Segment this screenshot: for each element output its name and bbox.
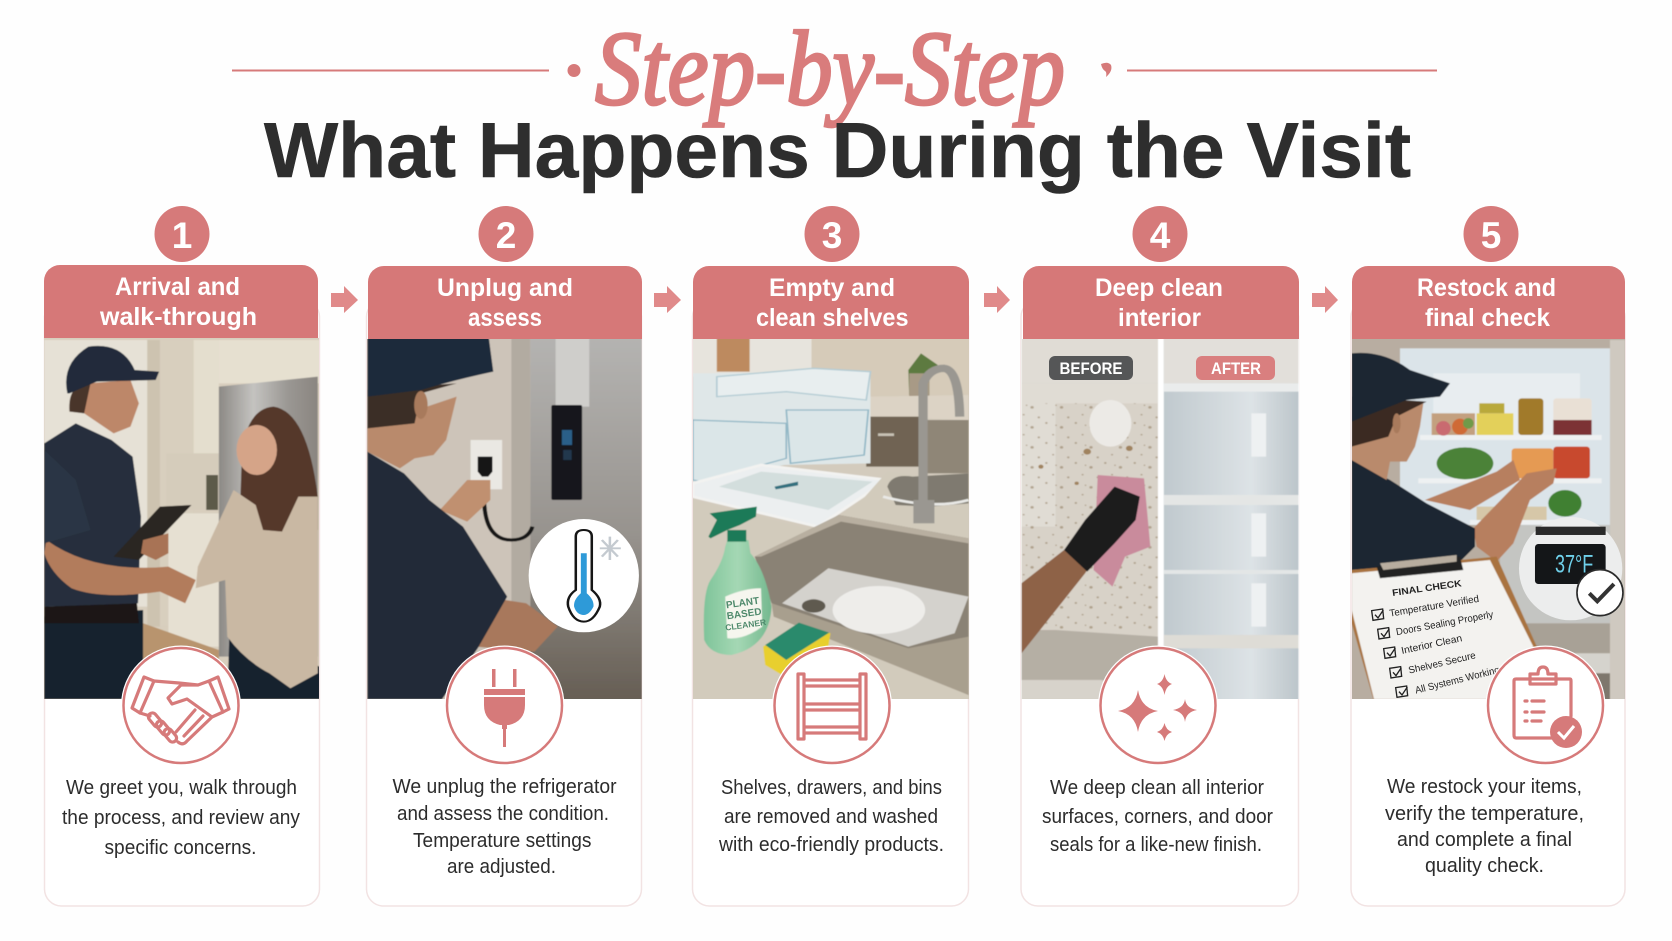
header: unplug: assess — [468, 304, 542, 332]
panel: step 5 — [1350, 206, 1627, 906]
icon: clipboard with check — [1486, 646, 1606, 766]
icon: sparkles — [1098, 646, 1218, 766]
card body — [44, 300, 320, 906]
arrow 1 — [331, 286, 358, 313]
number badge 2 — [478, 206, 534, 262]
number badge 5: 5 — [1481, 215, 1501, 256]
header: empty shelves: Empty and — [769, 274, 895, 302]
clipboard checklist text: FINAL CHECK — [1392, 578, 1463, 598]
script heading: Step-by-Step — [595, 10, 1065, 127]
number badge 2: 2 — [496, 215, 516, 256]
panel: step 1 — [42, 206, 320, 906]
description text: are adjusted. — [447, 856, 556, 878]
header: deep clean — [1023, 266, 1299, 339]
thermostat display badge — [1519, 517, 1623, 620]
description text: with eco-friendly products. — [718, 834, 944, 856]
header: empty shelves: clean shelves — [756, 304, 908, 332]
card body — [1021, 300, 1298, 906]
header: unplug — [368, 266, 642, 339]
arrow 4 — [1312, 286, 1338, 313]
description text: and assess the condition. — [397, 803, 609, 825]
header: restock: Restock and — [1417, 274, 1556, 302]
before label — [1049, 356, 1133, 380]
number badge 3: 3 — [822, 215, 842, 256]
after label: AFTER — [1211, 359, 1261, 378]
number badge 3 — [804, 206, 860, 262]
icon: plug — [444, 646, 564, 766]
photo: technician greets customer — [42, 333, 320, 700]
photo: before and after interior — [1020, 333, 1302, 700]
description text: Temperature settings — [413, 830, 592, 852]
description text — [1042, 777, 1273, 856]
description text: seals for a like-new finish. — [1050, 834, 1262, 856]
header: unplug: Unplug and — [437, 274, 573, 302]
header: deep clean: interior — [1118, 304, 1201, 332]
clipboard checklist text: Shelves Secure — [1408, 650, 1477, 677]
photo: washing shelves in sink — [689, 333, 971, 700]
title block — [232, 10, 1437, 194]
thermostat display badge: 37°F — [1555, 551, 1593, 579]
label text on bottle: CLEANER — [725, 617, 767, 633]
arrow 2 — [654, 286, 681, 313]
description text: We deep clean all interior — [1050, 777, 1264, 799]
photo: restocking the fridge with checklist — [1350, 333, 1627, 700]
label text on bottle: PLANT — [725, 596, 760, 611]
description text: verify the temperature, — [1385, 803, 1584, 825]
decorative title rule left — [232, 70, 549, 72]
description text: specific concerns. — [104, 837, 256, 859]
clipboard checklist text — [1389, 578, 1501, 697]
before label: BEFORE — [1060, 359, 1122, 378]
header: restock — [1352, 266, 1625, 339]
panel: step 2 — [366, 206, 642, 906]
description text: Shelves, drawers, and bins — [721, 777, 942, 799]
clipboard checklist text: Doors Sealing Properly — [1395, 609, 1494, 638]
clipboard checklist text: Temperature Verified — [1389, 594, 1480, 620]
title dot right — [1101, 63, 1111, 77]
header: arrival: Arrival and — [115, 273, 240, 301]
description text — [62, 777, 300, 859]
clipboard checklist text: Interior Clean — [1400, 633, 1463, 657]
clipboard checklist text: All Systems Working — [1414, 665, 1501, 697]
number badge 4: 4 — [1150, 215, 1171, 256]
icon: thermometer badge — [529, 519, 639, 632]
description text: surfaces, corners, and door — [1042, 806, 1273, 828]
card body — [366, 300, 642, 906]
arrow 3 — [984, 286, 1010, 313]
title dot left — [568, 64, 580, 77]
description text: are removed and washed — [724, 806, 938, 828]
icon: shelves — [772, 646, 892, 766]
header: empty shelves — [693, 266, 969, 339]
header: deep clean: Deep clean — [1095, 274, 1223, 302]
description text: We restock your items, — [1387, 776, 1582, 798]
header: arrival — [44, 265, 318, 338]
photo: technician unplugging fridge — [366, 333, 642, 700]
icon: handshake — [121, 646, 241, 766]
description text: We unplug the refrigerator — [392, 776, 617, 798]
description text: quality check. — [1425, 855, 1544, 877]
description text: the process, and review any — [62, 807, 300, 829]
number badge 1 — [154, 206, 210, 262]
number badge 1: 1 — [172, 215, 192, 256]
header: restock: final check — [1425, 304, 1550, 332]
label text on bottle — [726, 596, 766, 630]
panel: step 3 — [689, 206, 971, 906]
description text: and complete a final — [1397, 829, 1572, 851]
number badge 5 — [1464, 206, 1518, 262]
card body — [692, 300, 968, 906]
description text: We greet you, walk through — [66, 777, 297, 799]
description text — [718, 777, 944, 856]
number badge 4 — [1132, 206, 1188, 262]
after label — [1196, 356, 1275, 380]
label text on bottle: BASED — [726, 607, 762, 622]
check boxes — [1372, 609, 1408, 697]
panel: step 4 — [1020, 206, 1302, 906]
main heading: What Happens During the Visit — [264, 106, 1411, 194]
description text — [1385, 776, 1584, 877]
description text — [392, 776, 617, 878]
header: arrival: walk-through — [99, 303, 257, 331]
decorative title rule right — [1127, 70, 1437, 72]
card body — [1351, 300, 1625, 906]
